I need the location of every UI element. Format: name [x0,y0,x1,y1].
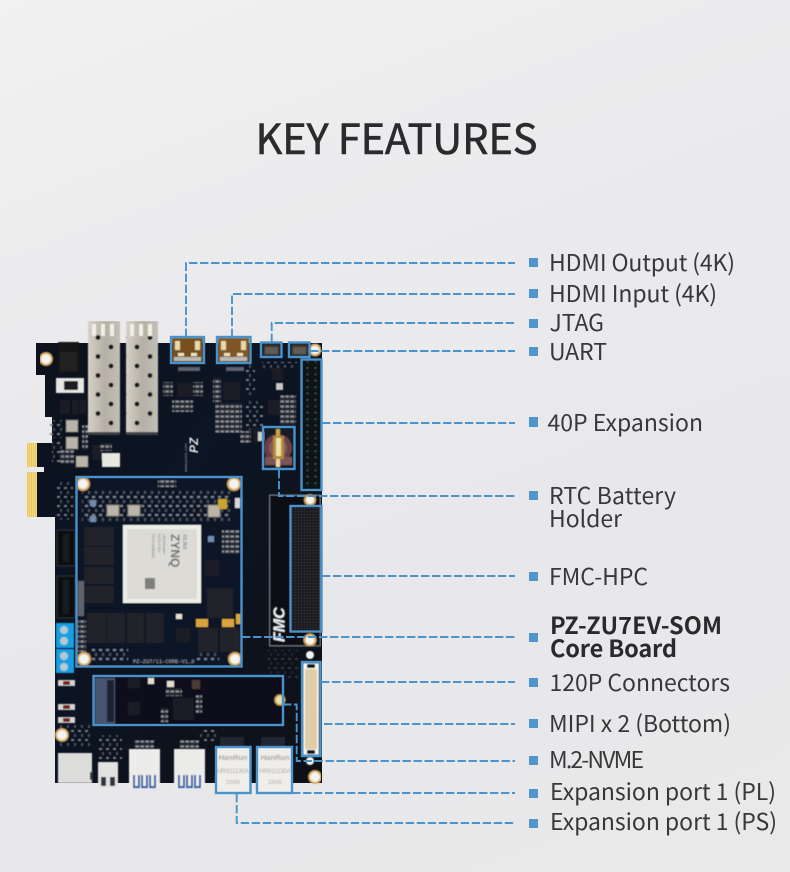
callout: PZ-ZU7EV-SOM Core Board [242,607,722,664]
FPGA chip: FFVC1156AAZ [151,534,155,559]
FMC-HPC connector: FMC [272,607,288,642]
silkscreen label: PZ-ZU7/11-CORE-V1_0 [133,659,194,665]
callout: M.2-NVME: M.2-NVME [549,741,644,775]
memory chips [84,527,164,643]
callout: Expansion port PL [292,773,776,807]
callout: PZ-ZU7EV-SOM Core Board: PZ-ZU7EV-SOM [550,607,722,641]
120P connector [303,663,319,755]
FPGA chip [123,525,201,603]
callout: HDMI Input [232,275,717,337]
callout: RTC Battery Holder: Holder [549,500,622,534]
callout: JTAG [272,304,604,342]
terminal blocks [56,623,74,673]
HDMI connectors [172,338,249,371]
callout: HDMI Input: HDMI Input (4K) [549,275,717,309]
USB-C connector [98,762,118,787]
power jack [58,342,79,373]
gold edge connector [27,443,38,517]
circuit board outline [36,343,322,783]
callout: PZ-ZU7EV-SOM Core Board: Core Board [550,630,677,664]
callout: 120P Connectors: 120P Connectors [550,664,730,698]
micro USB connectors [263,344,308,356]
callout: UART [310,333,607,367]
FPGA chip: XILINX [181,534,187,551]
RJ45 connectors: HR911130A [217,769,249,775]
mounting rings and holes [40,344,321,783]
USB 3 connectors [129,740,205,788]
callout: MIPI x 2: MIPI x 2 (Bottom) [549,705,731,739]
callout: M.2-NVME [283,704,644,775]
callout: 40P Expansion [322,404,703,438]
callout: Expansion port PS [237,794,777,837]
PZ logo [183,437,201,472]
callout: HDMI Output [186,244,735,337]
callout: Expansion port PS: Expansion port 1 (PS) [550,803,777,837]
core board module [76,477,242,667]
FMC-HPC connector [270,495,320,646]
callout: Expansion port PL: Expansion port 1 (PL) [550,773,776,807]
callout: FMC-HPC: FMC-HPC [549,558,648,592]
RJ45 connectors [216,737,292,793]
callout: 120P Connectors [321,664,730,698]
title: KEY FEATURES [256,106,538,166]
callout: RTC Battery Holder [279,470,676,534]
FPGA chip: UltraScale+ [162,534,167,555]
SD card slot [58,753,93,783]
RJ45 connectors: 22/06 [226,780,240,786]
PZ logo: PZ [187,437,201,453]
board detail layer [40,321,321,793]
board photo [27,321,322,793]
RJ45 connectors: HanRun [261,753,290,762]
power switch [56,378,84,393]
SATA connectors [57,530,75,618]
RJ45 connectors: HR911130A [259,769,291,775]
callout: UART: UART [549,333,607,367]
ICs and passive parts [50,362,298,759]
tactile buttons [58,680,75,723]
callout: FMC-HPC [322,558,648,592]
RJ45 connectors: 22/06 [268,780,282,786]
callout: RTC Battery Holder: RTC Battery [549,477,676,511]
M.2 region [94,677,285,725]
callout: JTAG: JTAG [550,304,604,338]
40P expansion header [303,361,320,489]
RJ45 connectors: HanRun [219,753,248,762]
FPGA chip: XCZU7EV [157,534,162,553]
blue highlight boxes [76,337,322,793]
RTC battery holder [264,428,294,468]
callout: 40P Expansion: 40P Expansion [548,404,703,438]
SFP cages [88,321,158,435]
callout: MIPI x 2 [324,705,731,739]
callout: HDMI Output: HDMI Output (4K) [549,244,735,278]
FPGA chip: ZYNQ [168,534,182,567]
PZ logo: www.pzsoc.com [183,443,188,472]
